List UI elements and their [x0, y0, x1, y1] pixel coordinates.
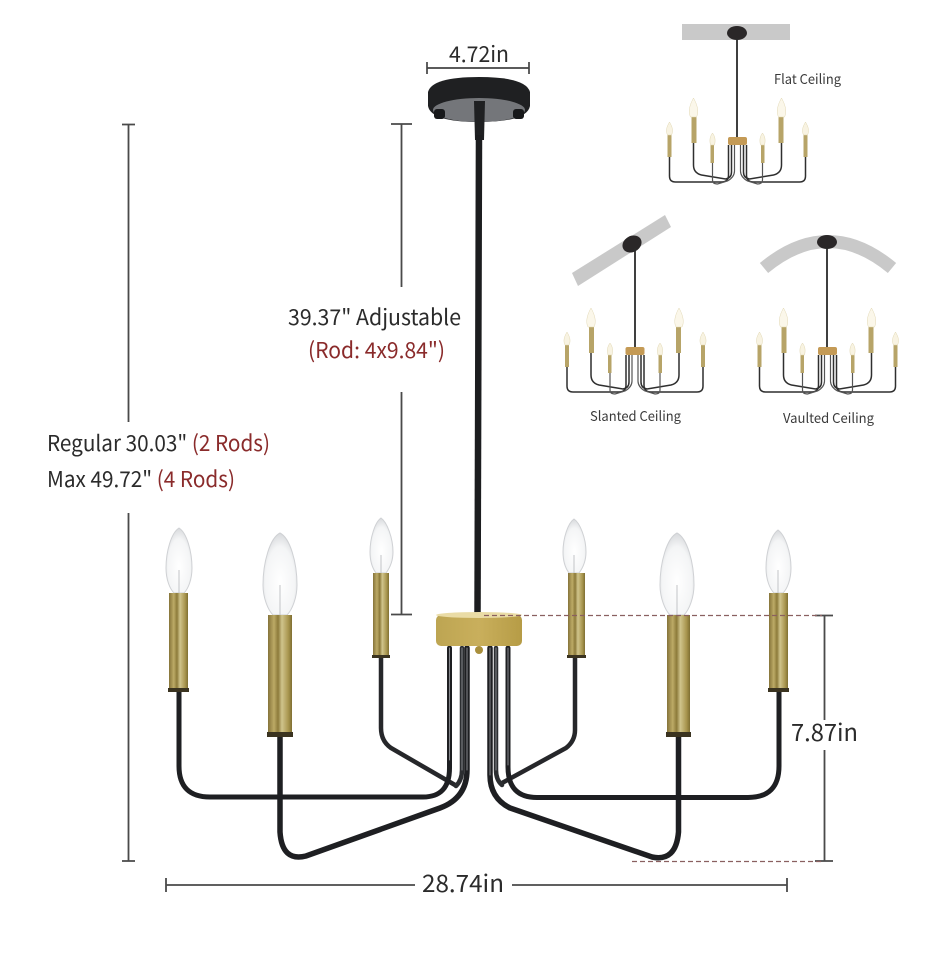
text: rod length — [288, 300, 461, 365]
dimension: body height: 7.87in — [791, 713, 858, 748]
dimension: body height — [484, 616, 858, 862]
candle: left large — [263, 533, 297, 737]
dimension: overall width — [166, 864, 787, 899]
text: overall height — [47, 426, 270, 494]
central gold hub — [436, 612, 522, 654]
text: rod length: (Rod: 4x9.84") — [308, 333, 445, 365]
candle: left outer — [166, 528, 192, 692]
candle: right outer — [766, 530, 791, 692]
label: vaulted ceiling: Vaulted Ceiling — [783, 407, 874, 427]
candle: right small — [563, 519, 586, 658]
hanging rod — [478, 135, 479, 616]
panel: flat ceiling — [666, 24, 841, 184]
text: overall height: Regular 30.03" (2 Rods) — [47, 426, 270, 458]
main chandelier — [166, 77, 791, 858]
candle: left small — [370, 518, 393, 658]
panel: slanted ceiling — [564, 215, 706, 425]
arms — [179, 648, 779, 858]
dimension: overall height line — [122, 124, 135, 861]
candle: right large — [660, 533, 694, 737]
dimension: canopy width: 4.72in — [449, 37, 509, 69]
ceiling canopy — [428, 77, 530, 140]
label: flat ceiling: Flat Ceiling — [774, 68, 841, 88]
panel: vaulted ceiling — [756, 235, 899, 427]
label: slanted ceiling: Slanted Ceiling — [590, 405, 681, 425]
text: overall height: Max 49.72" (4 Rods) — [47, 462, 235, 494]
dimension: rod length line — [391, 124, 412, 614]
text: rod length: 39.37" Adjustable — [288, 300, 461, 332]
dimension: canopy width — [427, 37, 529, 74]
dimension: overall width: 28.74in — [422, 864, 504, 899]
